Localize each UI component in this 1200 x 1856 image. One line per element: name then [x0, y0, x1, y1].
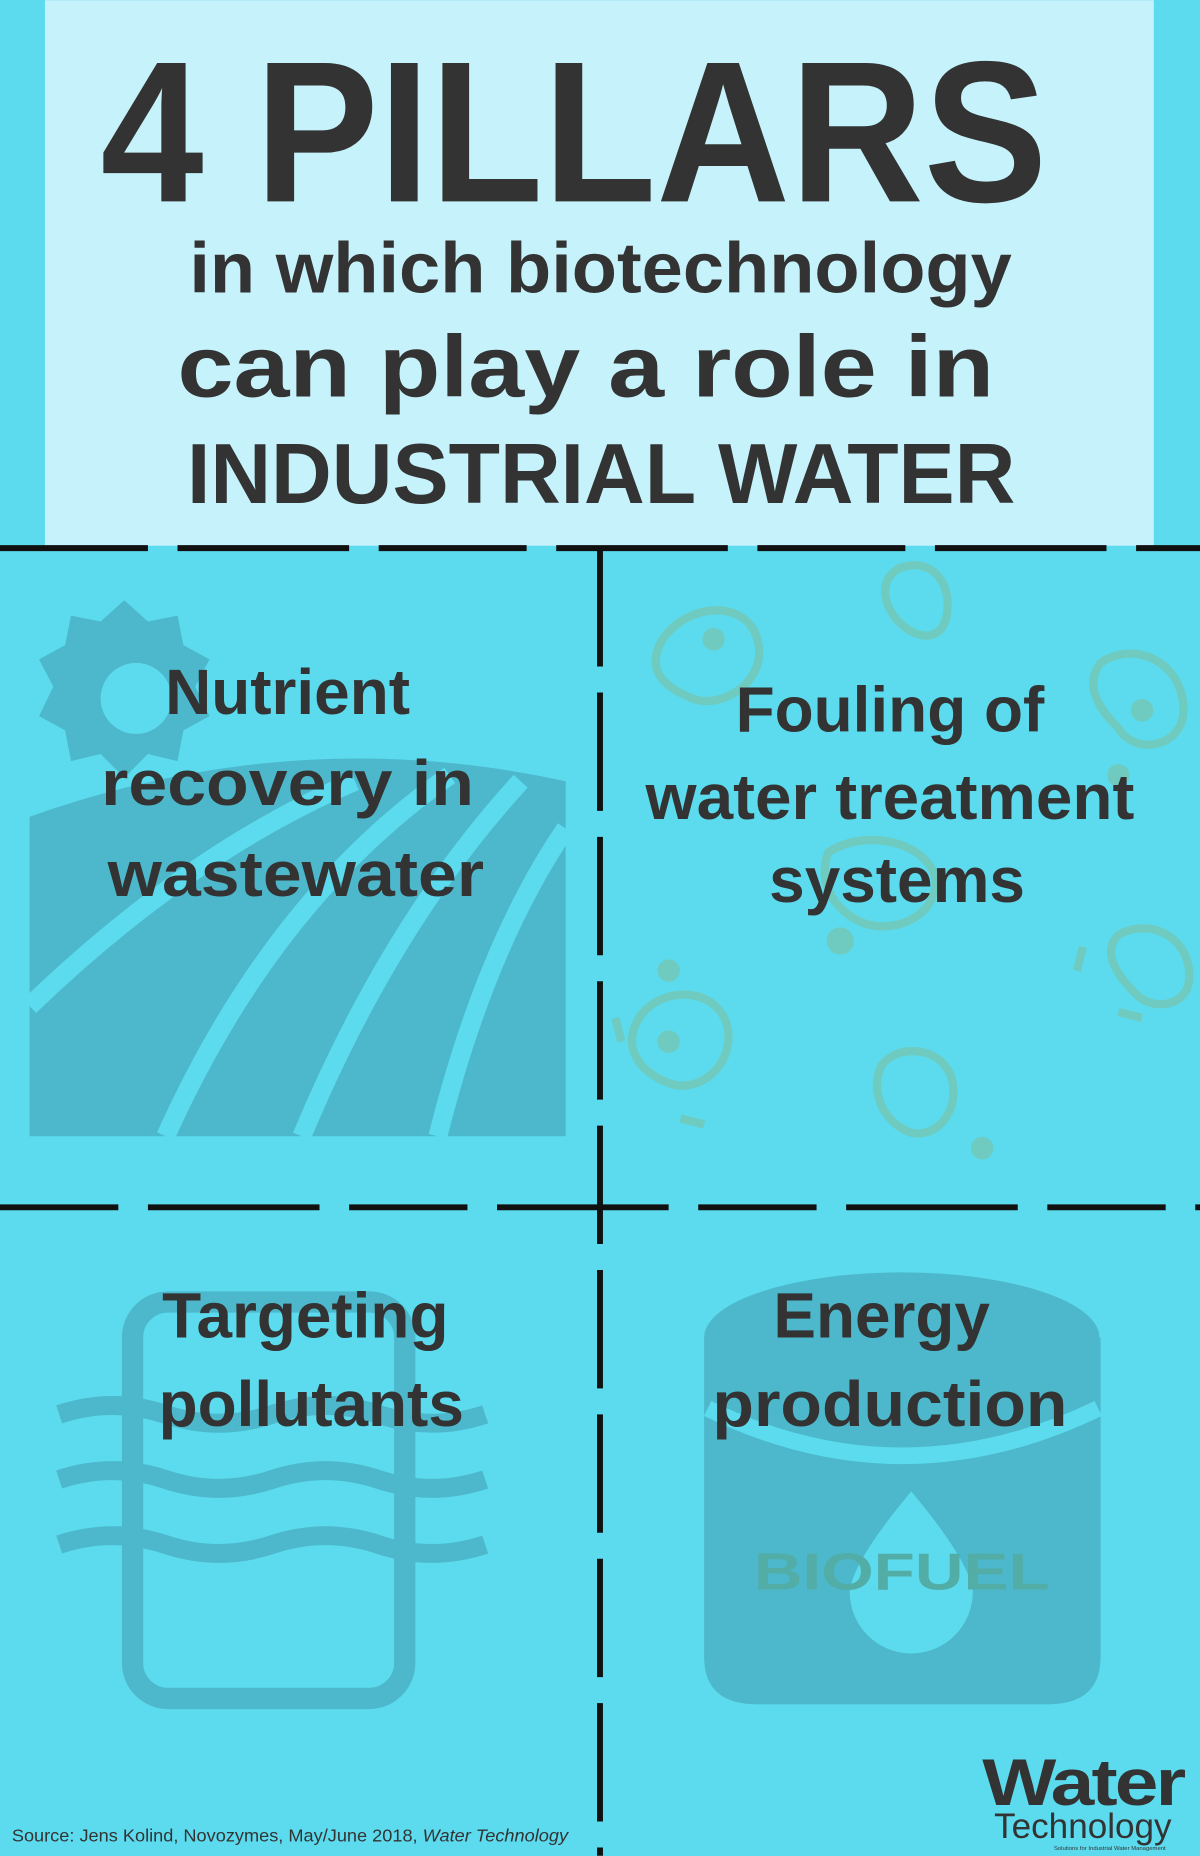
- logo: Water Technology: [982, 1746, 1185, 1852]
- text: nutrient recovery: Nutrient: [165, 656, 410, 728]
- subtitle: in which biotechnology: [189, 229, 1012, 308]
- text: fouling: [645, 674, 1134, 916]
- text: targeting pollutants: pollutants: [159, 1368, 464, 1440]
- text: nutrient recovery: [101, 656, 484, 910]
- text: nutrient recovery: wastewater: [107, 838, 484, 910]
- logo: Water Technology: Technology: [994, 1806, 1172, 1846]
- text: fouling: water treatment: [645, 761, 1134, 833]
- subtitle: [178, 229, 1015, 522]
- text: targeting pollutants: Targeting: [162, 1279, 448, 1351]
- text: nutrient recovery: recovery in: [101, 747, 474, 819]
- text: energy production: Energy: [773, 1279, 990, 1351]
- text: fouling: Fouling of: [736, 674, 1045, 746]
- icon: pollutants pipe and waves: [59, 1302, 485, 1698]
- text: fouling: systems: [769, 844, 1025, 916]
- source note: Source: Jens Kolind, Novozymes, May/June 2018, Water Technology: [12, 1826, 569, 1846]
- text: energy production: [712, 1279, 1067, 1440]
- text: targeting pollutants: [159, 1279, 464, 1440]
- logo: Water Technology: Water: [982, 1746, 1185, 1820]
- text: energy production: production: [712, 1368, 1067, 1440]
- title: 4 PILLARS: [101, 19, 1047, 244]
- icon: sun and field: [30, 600, 566, 1136]
- icon: biofuel barrel: BIOFUEL: [754, 1544, 1050, 1602]
- logo: Water Technology: Solutions for Industrial Water Management: [1054, 1846, 1166, 1852]
- header panel: [45, 0, 1154, 546]
- subtitle: INDUSTRIAL WATER: [187, 427, 1015, 522]
- icon: biofuel barrel: [704, 1272, 1101, 1704]
- subtitle: can play a role in: [178, 318, 994, 416]
- icon: bacteria: [615, 565, 1189, 1155]
